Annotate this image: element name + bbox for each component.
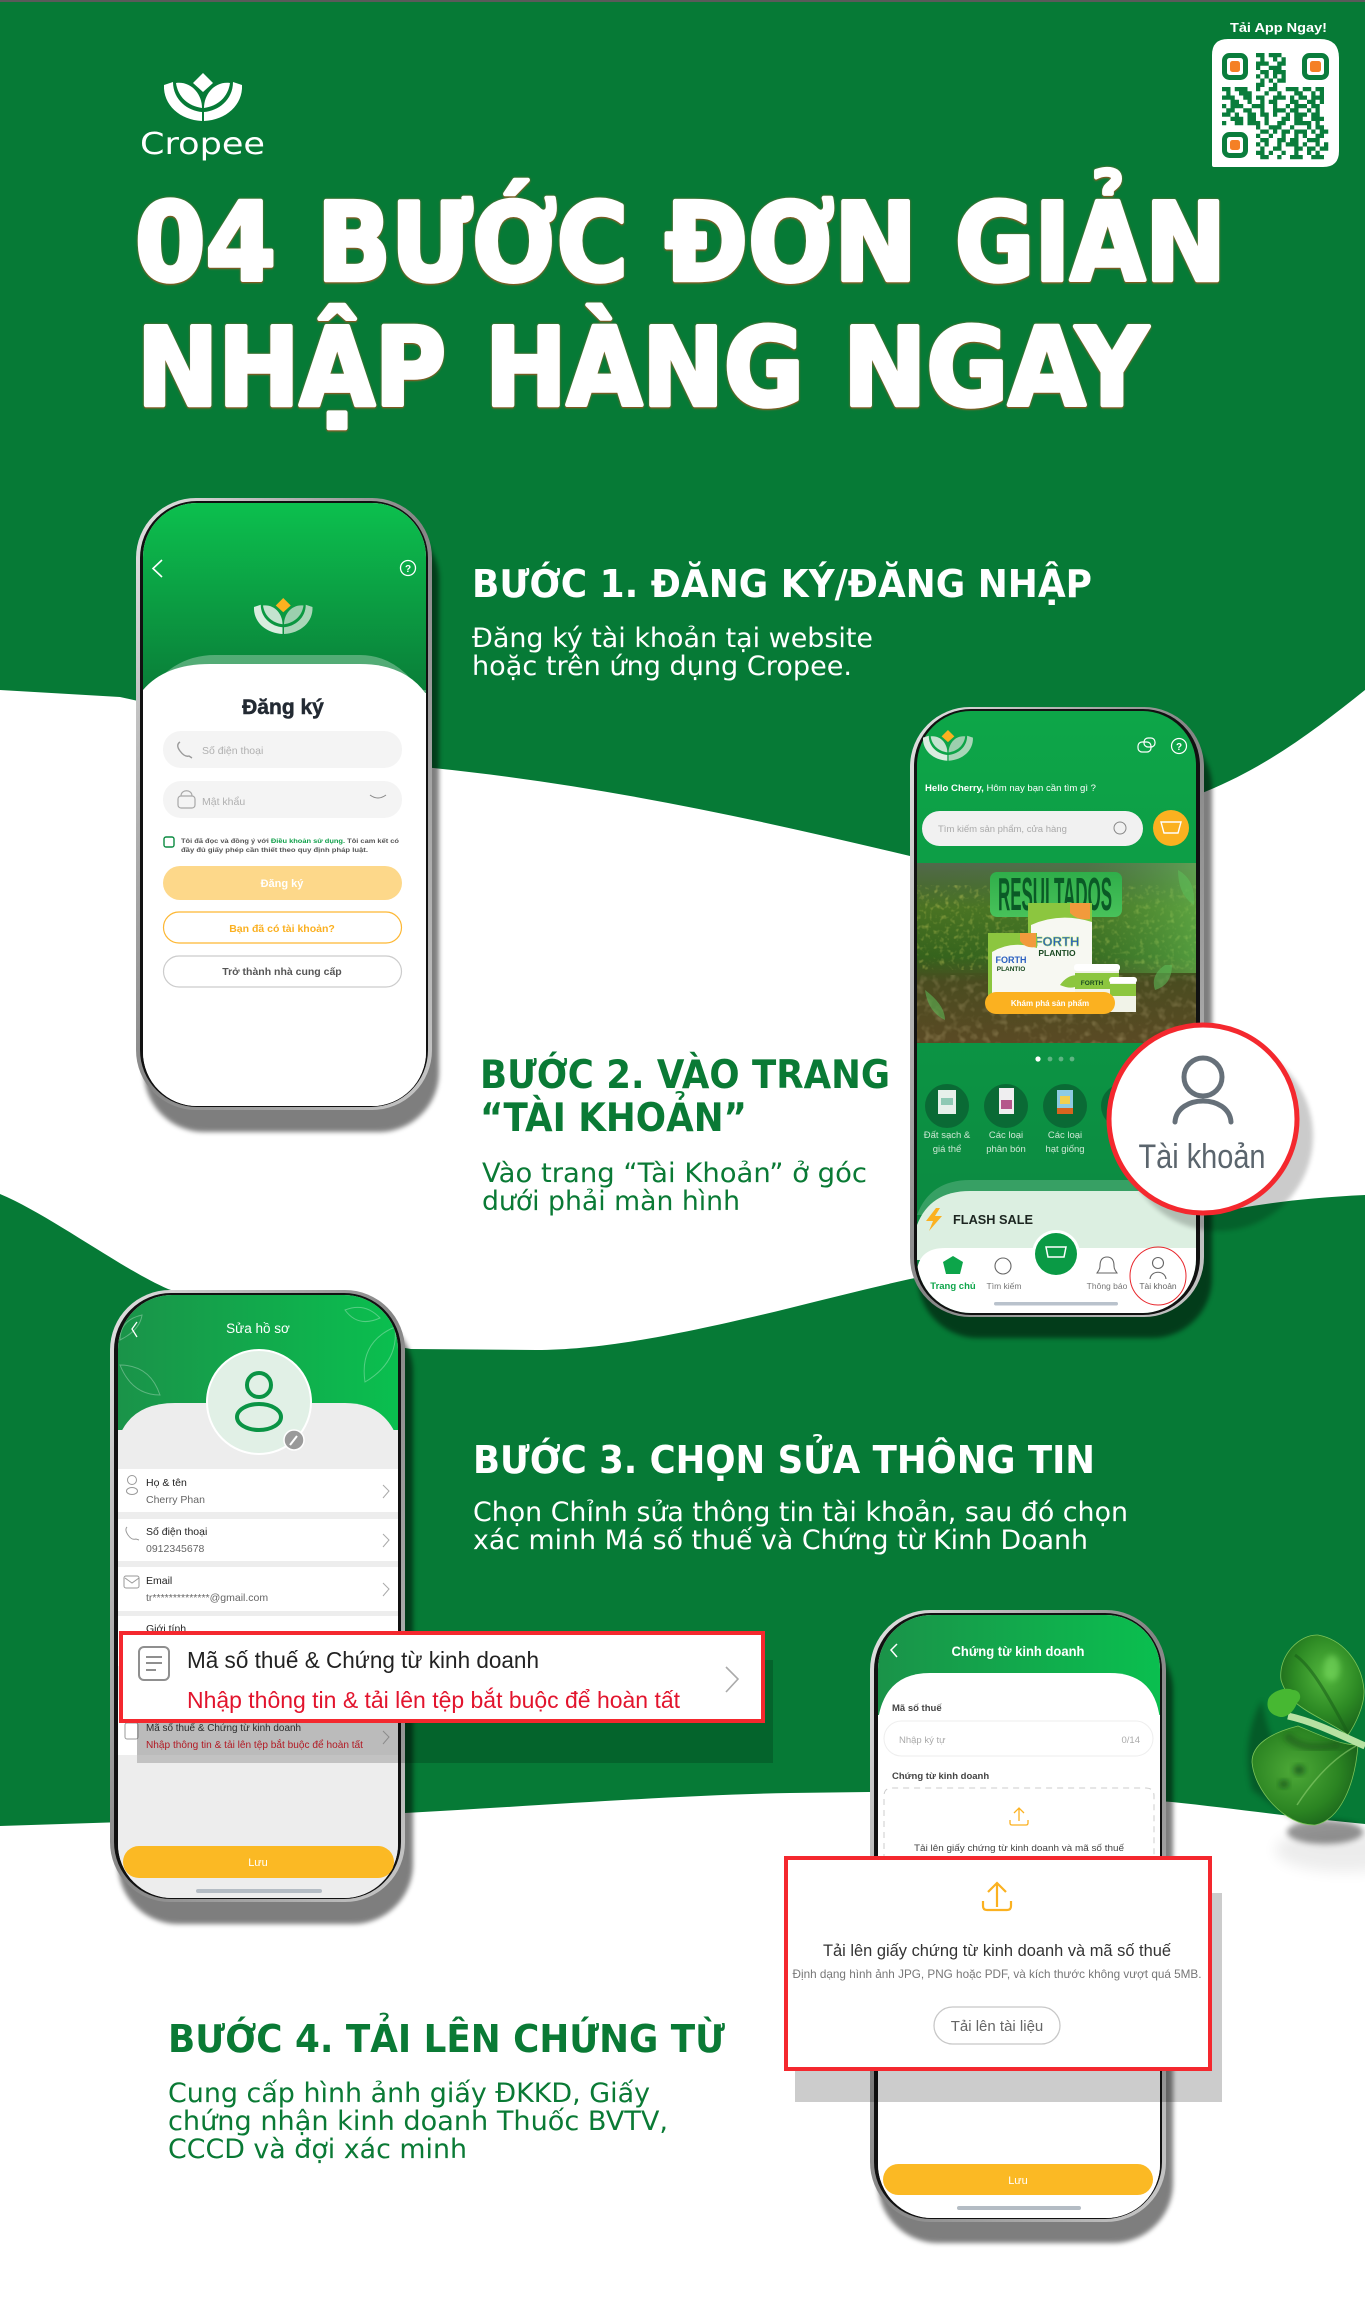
search bar <box>922 811 1143 846</box>
category labels: phân bón <box>986 1144 1026 1155</box>
bud <box>1267 1689 1300 1717</box>
stem <box>1288 1716 1365 1746</box>
step 3 description <box>473 1497 1128 1556</box>
title: 04 <box>135 181 276 306</box>
gray content panel <box>118 1403 398 1898</box>
row: tax and documents <box>125 1722 389 1751</box>
row: name <box>126 1476 389 1506</box>
category labels: trồng <box>1112 1144 1134 1155</box>
title: GIẢN <box>955 169 1226 306</box>
chevron <box>726 1667 738 1692</box>
flash sale panel: FLASH SALE <box>953 1212 1033 1227</box>
terms checkbox: đầy đủ giấy phép cần thiết theo quy định pháp luật. <box>181 845 368 854</box>
carousel dots <box>1035 1056 1074 1062</box>
row: name: Họ & tên <box>146 1477 187 1489</box>
avatar <box>207 1350 311 1454</box>
save button <box>883 2164 1153 2195</box>
step 3 description: Chọn Chỉnh sửa thông tin tài khoản, sau đó chọn <box>473 1497 1128 1528</box>
logo: Cropee <box>140 73 265 162</box>
category labels: Đất sạch & <box>924 1130 971 1141</box>
save button <box>123 1846 394 1878</box>
password input: Mật khẩu <box>202 796 245 808</box>
step 4 description: chứng nhận kinh doanh Thuốc BVTV, <box>168 2106 668 2137</box>
login button: Bạn đã có tài khoản? <box>229 923 335 935</box>
step 2 description <box>482 1158 867 1217</box>
row: email: tr**************@gmail.com <box>146 1592 268 1604</box>
callout: tax row highlight <box>121 1633 773 1763</box>
document upload field: Chứng từ kinh doanh <box>892 1771 989 1782</box>
product bags <box>988 903 1137 1012</box>
save button: Lưu <box>1008 2175 1028 2187</box>
back arrow <box>891 1644 897 1657</box>
bottom navigation <box>917 1230 1196 1313</box>
document upload field: Tải lên giấy chứng từ kinh doanh và mã số thuế <box>914 1843 1125 1854</box>
bottom navigation: Thông báo <box>1087 1281 1128 1291</box>
tax code field: 0/14 <box>1122 1735 1140 1746</box>
label: Tài khoản <box>1138 1138 1266 1176</box>
row: phone <box>126 1526 389 1555</box>
product bags: PLANTIO <box>1038 948 1076 958</box>
title: HÀNG <box>485 304 804 431</box>
title: ĐƠN <box>665 181 917 306</box>
product bags: FORTH <box>1035 934 1079 949</box>
phone 3: edit profile <box>110 1290 413 1924</box>
callout: account magnifier <box>1109 1025 1313 1231</box>
home indicator <box>196 1889 322 1893</box>
category labels <box>924 1130 1084 1154</box>
QR card <box>1212 39 1339 167</box>
bottom navigation: Tìm kiếm <box>987 1281 1021 1291</box>
icon: lotus logo <box>164 73 242 121</box>
row: email: Email <box>146 1575 172 1587</box>
leaf decoration <box>1248 1635 1365 1872</box>
decorative leaves <box>120 1307 395 1395</box>
register button: Đăng ký <box>261 878 304 890</box>
category icons <box>925 1084 1112 1128</box>
explore button: Khám phá sản phẩm <box>1011 999 1089 1008</box>
icon: document <box>139 1647 169 1680</box>
row: phone: 0912345678 <box>146 1543 205 1555</box>
upper leaf <box>1281 1635 1364 1735</box>
product banner <box>917 863 1196 1043</box>
terms checkbox: Tôi đã đọc và đồng ý với Điều khoản sử dụng. Tôi cam kết có <box>181 836 399 845</box>
upload heading: Tải lên giấy chứng từ kinh doanh và mã số thuế <box>823 1942 1171 1960</box>
QR caption: Tải App Ngay! <box>1230 20 1327 35</box>
category labels: Các loại <box>989 1130 1023 1141</box>
tax code field: Nhập ký tự <box>899 1735 946 1746</box>
category labels: hạt giống <box>1045 1144 1085 1155</box>
category labels: Các loại <box>1048 1130 1082 1141</box>
phone 4: business documents <box>870 1610 1173 2243</box>
step 2 description: Vào trang “Tài Khoản” ở góc <box>482 1158 867 1189</box>
back arrow <box>132 1322 137 1337</box>
phone input: Số điện thoại <box>202 745 263 757</box>
row: gender: Giới tính <box>146 1623 186 1635</box>
row: tax and documents: Nhập thông tin & tải lên tệp bắt buộc để hoàn tất <box>146 1738 363 1751</box>
bottom navigation: Tài khoản <box>1139 1281 1177 1291</box>
step 1 description <box>472 623 873 682</box>
back arrow <box>153 560 162 577</box>
brand name: Cropee <box>140 127 265 162</box>
tax code field: Mã số thuế <box>892 1703 942 1714</box>
product banner: RESULTADOS <box>998 868 1112 920</box>
callout: upload highlight <box>786 1858 1222 2102</box>
title: NGAY <box>843 306 1150 431</box>
QR finder patterns <box>1224 56 1326 156</box>
leaf shadow <box>1248 1700 1365 1872</box>
save button: Lưu <box>248 1857 268 1869</box>
greeting: Hello Cherry, Hôm nay bạn cần tìm gì ? <box>925 783 1096 794</box>
phone input <box>163 731 402 768</box>
step 3 heading: BƯỚC 3. CHỌN SỬA THÔNG TIN <box>473 1434 1095 1482</box>
supplier button: Trở thành nhà cung cấp <box>222 966 342 978</box>
help icon: ? <box>405 564 411 575</box>
list rows <box>118 1469 398 1755</box>
bottom navigation: Trang chủ <box>930 1281 976 1292</box>
step 1 heading: BƯỚC 1. ĐĂNG KÝ/ĐĂNG NHẬP <box>472 562 1092 606</box>
supplier button <box>164 956 402 987</box>
step 3 description: xác minh Má số thuế và Chứng từ Kinh Doanh <box>473 1525 1088 1556</box>
lower leaf <box>1252 1726 1358 1825</box>
upload button: Tải lên tài liệu <box>951 2018 1043 2035</box>
title <box>135 169 1226 431</box>
product bags: FORTH <box>996 955 1026 965</box>
title: NHẬP <box>137 304 446 431</box>
row subtitle: Nhập thông tin & tải lên tệp bắt buộc để hoàn tất <box>187 1687 681 1713</box>
upload note: Định dạng hình ảnh JPG, PNG hoặc PDF, và kích thước không vượt quá 5MB. <box>792 1967 1202 1981</box>
login button <box>164 912 402 943</box>
password input <box>163 781 402 818</box>
row: phone: Số điện thoại <box>146 1526 207 1538</box>
row: tax and documents: Mã số thuế & Chứng từ kinh doanh <box>146 1722 301 1734</box>
title: BƯỚC <box>317 179 628 306</box>
step 1 description: Đăng ký tài khoản tại website <box>472 623 873 654</box>
QR code block <box>1212 20 1339 167</box>
chat and help icons: ? <box>1176 742 1182 753</box>
phone 2: home screen <box>910 707 1212 1338</box>
explore button <box>985 992 1115 1014</box>
icon: upload <box>983 1883 1011 1910</box>
step 4 description: Cung cấp hình ảnh giấy ĐKKD, Giấy <box>168 2078 650 2109</box>
app logo <box>254 598 313 634</box>
phone 1: register screen <box>136 498 439 1132</box>
tax code field <box>884 1703 1153 1756</box>
screen title: Chứng từ kinh doanh <box>952 1644 1084 1659</box>
upload button <box>934 2007 1060 2044</box>
search bar: Tìm kiếm sản phẩm, cửa hàng <box>938 824 1067 835</box>
step 4 description: CCCD và đợi xác minh <box>168 2134 467 2165</box>
document upload field <box>884 1771 1154 1860</box>
app logo small <box>923 730 973 761</box>
icon: person <box>1175 1058 1231 1122</box>
step 2 description: dưới phải màn hình <box>482 1186 740 1217</box>
form title: Đăng ký <box>242 696 324 719</box>
white form card <box>143 664 426 1106</box>
product bags: FORTH <box>1081 980 1103 987</box>
row: name: Cherry Phan <box>146 1494 205 1506</box>
category labels: giá thể <box>933 1144 961 1155</box>
step 4 heading: BƯỚC 4. TẢI LÊN CHỨNG TỪ <box>168 2013 725 2061</box>
step 2 heading: BƯỚC 2. VÀO TRANG <box>480 1051 890 1098</box>
QR modules <box>1222 55 1328 157</box>
cart button <box>1153 810 1189 846</box>
row: email <box>124 1575 389 1604</box>
step 1 description: hoặc trên ứng dụng Cropee. <box>472 651 852 682</box>
product bags: PLANTIO <box>997 966 1025 973</box>
row title: Mã số thuế & Chứng từ kinh doanh <box>187 1647 539 1673</box>
register button <box>163 866 402 900</box>
terms checkbox <box>164 836 399 854</box>
step 4 description <box>168 2078 668 2165</box>
flash sale panel <box>917 1180 1196 1260</box>
help icon <box>400 560 416 576</box>
home indicator <box>957 2206 1081 2210</box>
step 2 heading <box>480 1051 890 1141</box>
chat and help icons <box>1138 738 1186 754</box>
step 2 heading: “TÀI KHOẢN” <box>480 1091 747 1141</box>
screen title: Sửa hồ sơ <box>226 1321 290 1336</box>
